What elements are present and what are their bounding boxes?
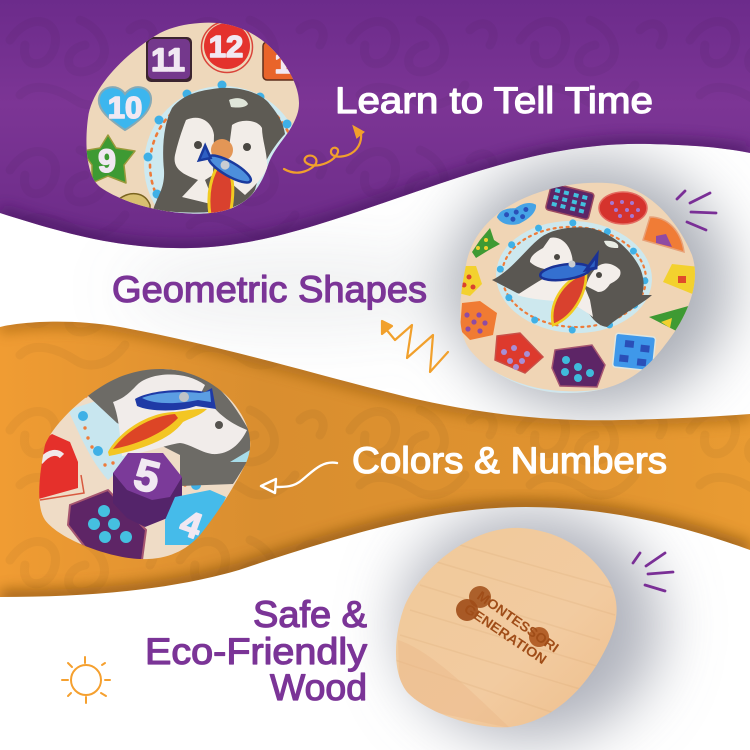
shape partial bottom: [120, 192, 151, 208]
icon: sun: [62, 657, 110, 703]
penguin white right lobe: [586, 264, 621, 292]
penguin white left lobe: [530, 238, 573, 270]
engraved logo: MONTESSORI: [474, 588, 562, 656]
purple sparks bottom: [633, 553, 673, 591]
wood grain: [395, 545, 620, 715]
yellow square piece: [663, 264, 695, 294]
board photo: clock top close-up: [86, 22, 299, 214]
heading: learn to tell time: Learn to Tell Time: [335, 80, 653, 121]
board photo: full clock face: [460, 182, 695, 393]
purple wave band: [0, 0, 750, 260]
shape 12: 12: [209, 29, 243, 64]
shape 11: 11: [151, 42, 185, 78]
orange wave band: [0, 315, 750, 605]
penguin eyes and beak: [194, 98, 251, 161]
shape heart 10: [99, 87, 151, 130]
zigzag arrow: [382, 321, 448, 372]
penguin left white lobe: [175, 118, 215, 205]
blue fish hand: [197, 146, 255, 188]
blue block 4: [165, 490, 226, 547]
penguin grey: [87, 369, 250, 486]
blue fish: [539, 255, 597, 283]
heading: geometric shapes: Geometric Shapes: [112, 269, 427, 310]
penguin white body: [517, 279, 593, 317]
clock markers: [78, 411, 201, 490]
ring: [493, 215, 655, 338]
shape heart 10: 10: [108, 90, 142, 125]
soft board shadows: [120, 160, 730, 740]
red fish: [552, 272, 586, 325]
red circle piece: [599, 192, 647, 224]
engraved logo: GENERATION: [461, 601, 549, 667]
green triangle piece: [649, 306, 688, 330]
purple pentagon piece: [552, 345, 605, 387]
purple square piece: [545, 183, 594, 220]
orange hexagon piece: [460, 301, 497, 340]
engraved logo: [456, 586, 562, 667]
red fish: [108, 409, 207, 456]
shape 1: [262, 42, 294, 81]
eye and triangle: [215, 421, 250, 462]
clock ring: [144, 80, 292, 214]
curly arrow to learn to tell time: [284, 127, 363, 173]
red pentagon piece: [495, 333, 543, 373]
heading: safe and eco-friendly wood: Eco-Friendly: [145, 631, 368, 672]
penguin white: [113, 374, 247, 456]
shape star 9: [82, 135, 135, 183]
orange quarter piece: [643, 217, 684, 252]
shape 11: [146, 37, 192, 82]
purple hole with cyan dots: [68, 490, 146, 560]
blue heart piece: [496, 203, 536, 225]
penguin right white lobe: [225, 121, 267, 195]
blue fish: [135, 388, 216, 410]
heading: safe and eco-friendly wood: Safe &: [253, 594, 367, 635]
heading: safe and eco-friendly wood: Wood: [270, 667, 367, 708]
heading: colors and numbers: Colors & Numbers: [352, 440, 667, 481]
ring dots: [83, 394, 231, 487]
purple block 5: [113, 450, 182, 527]
shape star 9: 9: [98, 143, 116, 179]
shape 12: [202, 22, 252, 72]
green piece: [472, 228, 500, 258]
red block: [35, 434, 84, 500]
shape 1: 1: [275, 47, 291, 80]
penguin body: [153, 88, 285, 213]
yellow piece: [461, 266, 482, 296]
heading: safe and eco-friendly wood: [145, 594, 368, 708]
penguin: [492, 227, 652, 327]
red fish hand: [209, 160, 233, 215]
purple sparks top: [677, 191, 716, 230]
blue block 4: 4: [175, 502, 208, 547]
board photo: wooden back: [390, 520, 625, 735]
ring edge: [69, 402, 126, 480]
blue square piece: [612, 333, 656, 371]
board photo: colored block close-up: [35, 365, 255, 565]
purple block 5: 5: [129, 450, 165, 503]
eyes and nose: [554, 241, 618, 278]
white arrow to block: [261, 463, 337, 493]
